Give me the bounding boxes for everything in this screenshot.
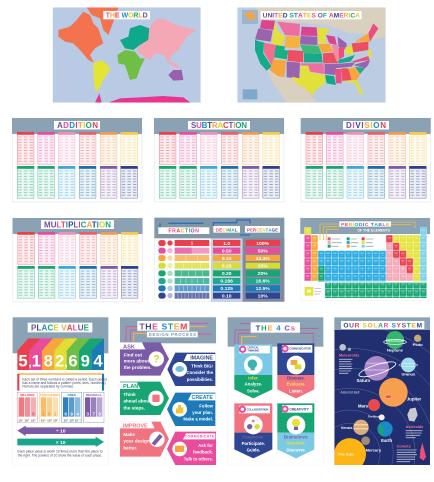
place powers row: 10³ (47, 418, 51, 422)
the sun (334, 438, 366, 465)
step: create: your plan. (192, 410, 213, 415)
title: division: DIVISION (346, 121, 386, 130)
poster: the 4 cs (228, 317, 323, 465)
step: plan: PLAN (123, 384, 138, 390)
step: ask: the problem. (124, 365, 152, 370)
period: thousands: 1 (42, 412, 45, 417)
text block: period explanation: Periods are separated by commas. (22, 385, 74, 389)
banner: collaboration: COLLABORATION (247, 408, 268, 411)
decimal column: 0.10 (222, 293, 232, 299)
decimal column (213, 240, 240, 299)
title: subtraction: SUBTRACTION (191, 121, 247, 130)
percentage column: 100% (256, 241, 270, 247)
step: imagine: IMAGINE (190, 356, 213, 362)
step: improve: IMPROVE (123, 423, 148, 429)
banner: collaboration: Guide. (247, 448, 260, 453)
percentage column: 50% (258, 248, 268, 254)
digit rainbow band: 2 (55, 352, 64, 371)
meteoroids (339, 344, 359, 373)
moon: The Moon (368, 415, 381, 419)
poster: the world map (53, 7, 201, 103)
banner: creativity: Brainstorm. (284, 435, 308, 440)
banner: collaboration: Cooperate. (242, 435, 265, 440)
planet: saturn (356, 356, 397, 383)
planet: neptune (384, 331, 406, 353)
period: decimals: 7 (92, 412, 95, 417)
the sun: The Sun (338, 451, 354, 456)
planet: earth: Earth (381, 438, 393, 443)
step: create: CREATE (191, 395, 213, 401)
asteroids (406, 408, 423, 438)
continents (58, 7, 197, 103)
step: ask (120, 342, 169, 376)
poster: our solar system (334, 317, 430, 465)
step: plan: ahead about (123, 399, 151, 404)
decimal column: 0.20 (222, 271, 232, 277)
title: the 4 cs: THE 4 Cs (256, 323, 295, 332)
banner: creativity: Discover. (286, 447, 306, 452)
digit rainbow band: 9 (81, 352, 90, 371)
digit rainbow band: , (64, 356, 68, 370)
poster: division tables (301, 118, 431, 202)
percentage column: 10% (258, 293, 268, 299)
title: our solar system: OUR SOLAR SYSTEM (343, 322, 422, 329)
digit rainbow band: , (28, 356, 32, 370)
step: communicate: Ask for (198, 443, 213, 448)
text block: footer note: Each place value is worth 10 times more than the place to (17, 449, 103, 453)
label: asteroid belt: Asteroid Belt (341, 391, 360, 395)
step: create (167, 393, 215, 426)
text block: period explanation: has a name and follows a pattern (ones, tens, hundreds). (22, 381, 107, 385)
planet: venus: Venus (341, 425, 353, 430)
place powers row: 10² (53, 418, 57, 422)
period: ones (62, 392, 82, 423)
poster: addition tables (12, 118, 142, 202)
title: the world: THE WORLD (106, 13, 148, 20)
banner: communication: COMMUNICATION (289, 348, 311, 351)
period: decimals: 3 (86, 412, 89, 417)
step: ask: Find out (124, 352, 142, 357)
place powers row: 10⁷ (18, 418, 24, 422)
period: ones: 6 (64, 412, 67, 417)
title: multiplication: MULTIPLICATION (44, 220, 111, 230)
subheading: of the elements: OF THE ELEMENTS (357, 228, 391, 232)
place powers row: 10⁴ (41, 418, 46, 422)
period: ones: 9 (70, 412, 73, 417)
planet: saturn: Saturn (356, 378, 371, 383)
planet: jupiter: Jupiter (407, 397, 422, 402)
banner: critical thinking: THINKING (247, 350, 259, 353)
title: addition: ADDITION (57, 121, 98, 130)
planet: uranus: Uranus (401, 372, 416, 377)
banner: creativity: Simulate. (286, 441, 306, 446)
step: communicate (167, 432, 216, 465)
banner: critical thinking: CRITICAL (247, 347, 259, 350)
planet: uranus (399, 358, 418, 377)
period: decimals: DECIMALS (86, 393, 101, 397)
banner: collaboration (234, 403, 272, 458)
digit rainbow band: 8 (44, 352, 53, 371)
banner: communication (277, 343, 314, 398)
step: plan (120, 382, 169, 415)
legend cell (305, 287, 321, 296)
period: thousands: 8 (48, 412, 51, 417)
digit rainbow band: 5 (18, 352, 28, 371)
heading: periodic table: PERIODIC TABLE (341, 222, 390, 228)
place powers row: 10⁵ (31, 418, 36, 422)
element key (328, 237, 374, 248)
banner: communication: Listen. (289, 388, 303, 393)
planet: neptune: Neptune (387, 348, 404, 353)
step: imagine: Think BIG! (191, 364, 214, 369)
step: create: Follow (199, 403, 214, 408)
text block: period explanation (17, 373, 107, 391)
place powers row: 10⁰ (69, 418, 75, 422)
poster: subtraction tables (154, 118, 284, 202)
period: millions: 5 (32, 412, 35, 417)
decimal column: 1.0 (223, 241, 230, 247)
step: ask: more about (124, 358, 149, 363)
arrow: multiply by 10 (17, 437, 104, 447)
planet: earth (377, 421, 393, 443)
banner: communication: Discuss. (287, 376, 305, 381)
banner: communication: Evaluate. (286, 382, 306, 387)
title: the stem: THE STEM (139, 321, 187, 331)
period: thousands (39, 392, 59, 423)
step: imagine: possibilities. (187, 377, 213, 382)
banner: creativity (277, 403, 314, 458)
period: thousands: THOUSANDS (40, 393, 59, 397)
banner: critical thinking: Infer. (248, 376, 259, 381)
percentage column: 20% (258, 271, 268, 277)
banner: collaboration: Participate. (242, 441, 265, 446)
planet: pluto: Pluto (413, 342, 423, 347)
step: ask: ASK (123, 344, 136, 350)
period: ones: ONES (67, 393, 76, 397)
asteroids: Asteroids (406, 425, 423, 429)
place powers row (18, 418, 81, 422)
arrow: divide by 10: ÷ 10 (56, 429, 66, 435)
fraction bars: 1 (191, 241, 194, 246)
step: communicate: Talk to others. (184, 457, 213, 462)
decimal column: 0.125 (220, 286, 233, 292)
element cells (304, 227, 427, 298)
banner: creativity: CREATIVITY (289, 407, 310, 411)
step: communicate: feedback. (193, 450, 213, 455)
heading: fraction: FRACTION (168, 229, 199, 235)
moon (368, 414, 385, 420)
decimal column: 0.33 (222, 256, 232, 262)
poster: multiplication tables (12, 218, 142, 302)
percentage column: 12.5% (256, 286, 270, 292)
planet: jupiter (379, 378, 422, 407)
percentage column: 33.3% (256, 256, 270, 262)
step: plan: the steps. (123, 405, 145, 410)
step: improve: your design (123, 439, 150, 444)
digit rainbow band: 6 (68, 352, 78, 371)
step: imagine (167, 353, 215, 386)
banner: critical thinking: Solve. (247, 388, 260, 393)
step: communicate: COMMUNICATE (185, 435, 215, 439)
arrow: divide by 10 (17, 426, 104, 436)
percentage column: 25% (258, 264, 268, 270)
decimal column: 0.166 (220, 279, 233, 285)
decimal column: 0.50 (222, 248, 232, 254)
period: millions (17, 392, 37, 423)
arrow: multiply by 10: × 10 (56, 440, 66, 446)
title: united states of america: UNITED STATES OF AMERICA (263, 13, 360, 20)
heading: percentage: PERCENTAGE (247, 227, 278, 232)
step: create: Make a model. (183, 417, 213, 422)
period: decimals (84, 392, 104, 423)
heading: decimal: DECIMAL (216, 227, 238, 232)
digit rainbow band (17, 338, 104, 371)
place powers row: 10⁻¹ (75, 418, 81, 422)
planet: mercury (361, 436, 382, 452)
poster: united states map (237, 7, 386, 103)
poster: periodic table (300, 218, 430, 301)
comets (397, 443, 426, 462)
planet: mars: Mars (358, 403, 369, 408)
step: improve (120, 422, 169, 457)
planet: mars (358, 399, 380, 411)
decimal column: 0.25 (222, 264, 232, 270)
banner: critical thinking (234, 344, 272, 398)
planet: mercury: Mercury (366, 447, 382, 452)
step: imagine: Consider the (187, 370, 214, 375)
percentage column: 16.6% (256, 279, 270, 285)
subtitle: design process: DESIGN PROCESS (149, 332, 196, 337)
step: ask: ? (153, 354, 160, 366)
percentage column (246, 240, 280, 299)
place powers row: 10⁶ (24, 418, 30, 422)
period: decimals: 0 (98, 412, 101, 417)
step: plan: Think (123, 392, 136, 397)
digit rainbow band: 1 (32, 352, 41, 371)
step: improve: Make (123, 432, 135, 437)
period: ones: 4 (76, 412, 79, 417)
poster: fraction decimal percentage chart (154, 218, 284, 302)
title: the 4 cs (251, 322, 300, 333)
comets: Comets (397, 444, 411, 448)
meteoroids: Meteoroids (339, 353, 359, 357)
digit rainbow band: 4 (93, 352, 103, 371)
planet: pluto (412, 334, 422, 346)
banner: critical thinking: Analyze. (245, 382, 262, 387)
period: millions: MILLIONS (20, 393, 34, 397)
step: improve: better. (123, 445, 137, 450)
place powers row: 10¹ (64, 418, 68, 422)
states (255, 20, 378, 96)
poster: the stem design process (120, 317, 216, 465)
text block: period explanation: Each set of three numbers is called a period. Each period (22, 377, 107, 381)
period: thousands: 2 (54, 412, 57, 417)
text block: footer note: the right. The powers of 10 show the value of each place. (18, 454, 102, 458)
planet: venus (341, 420, 369, 435)
title: place value: PLACE VALUE (31, 323, 90, 332)
poster: place value (13, 317, 108, 465)
